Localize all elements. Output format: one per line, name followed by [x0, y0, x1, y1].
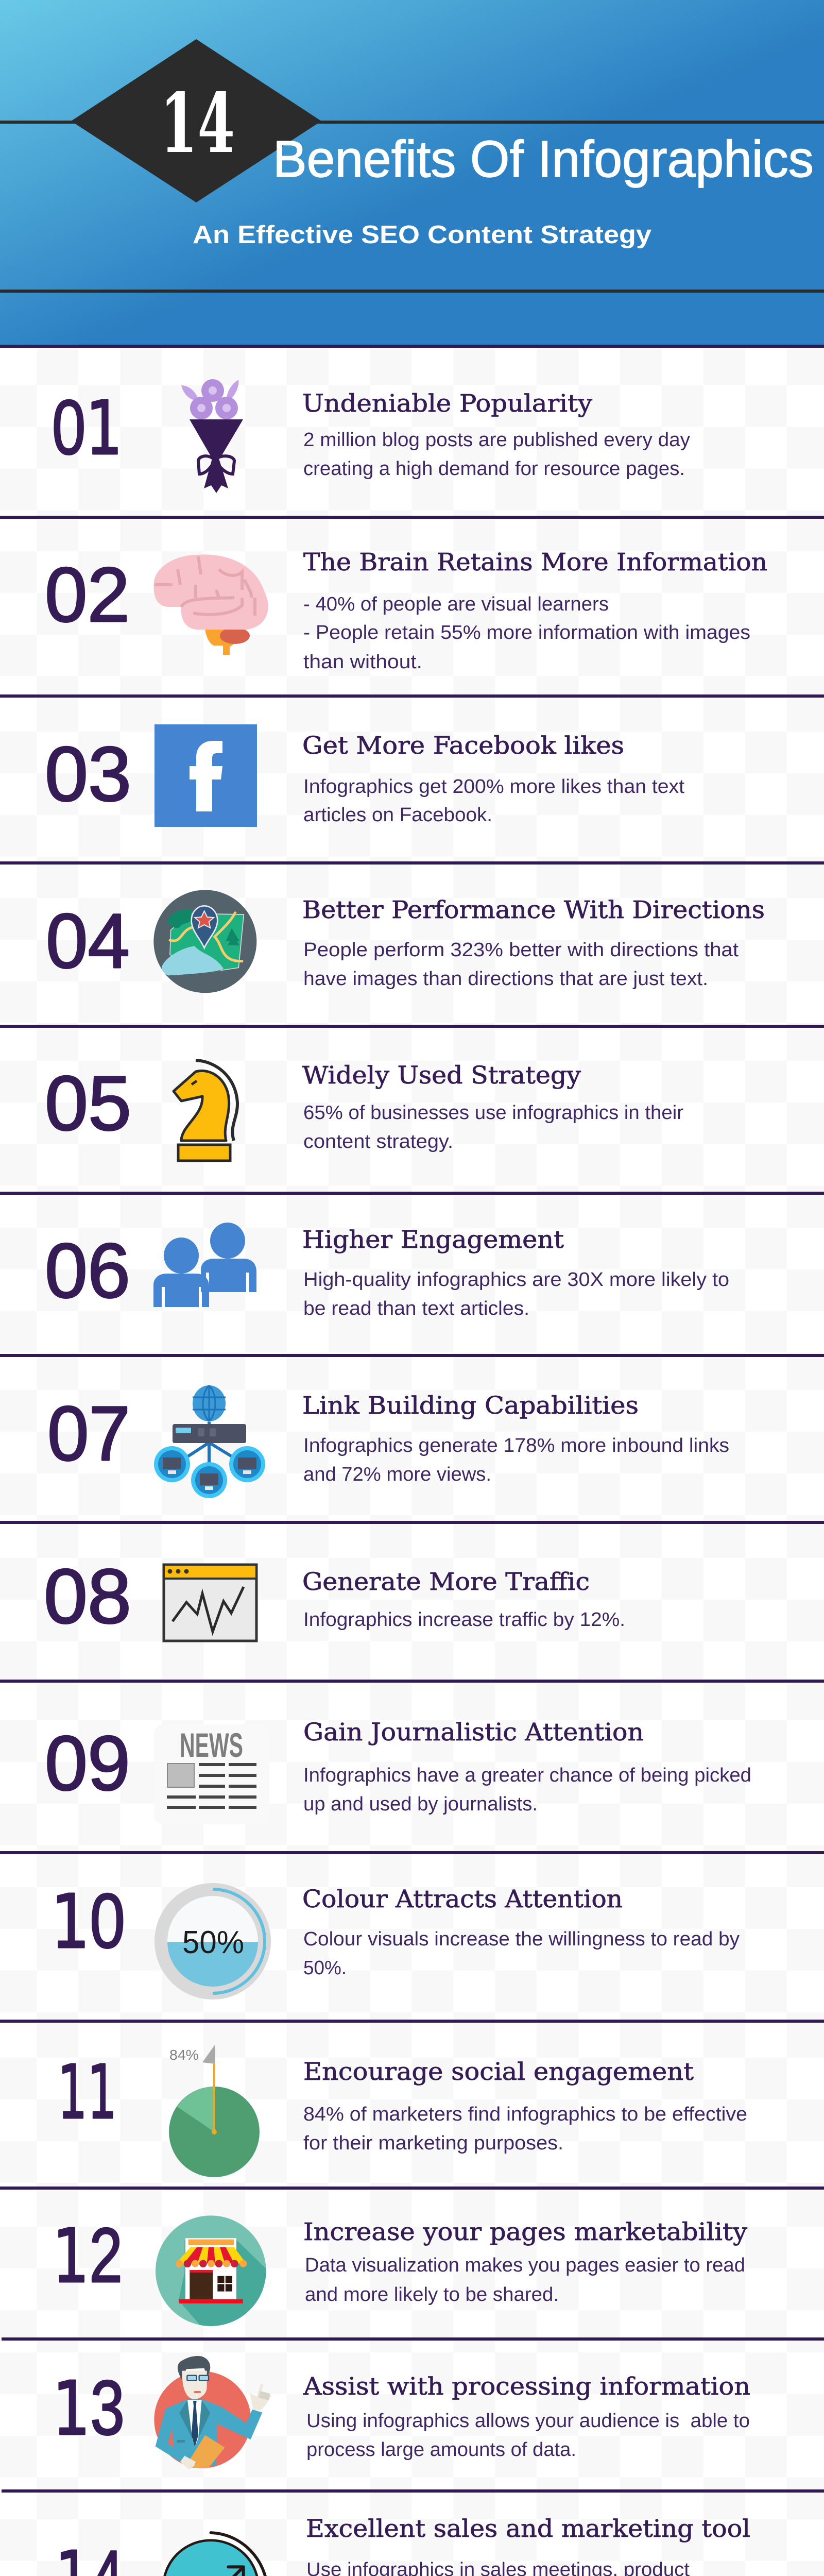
body text [306, 2410, 750, 2461]
body text [303, 1102, 683, 1153]
icon: brain [153, 554, 268, 655]
number 05: 05 [45, 1060, 131, 1146]
number 02: 02 [45, 551, 130, 638]
panel: 01 undeniable popularity [0, 348, 824, 518]
body text: Data visualization makes you pages easier to read [305, 2255, 745, 2276]
number 13: 13 [53, 2364, 125, 2452]
heading: Undeniable Popularity [302, 389, 592, 418]
diamond badge [71, 39, 321, 202]
heading: Increase your pages marketability [303, 2218, 747, 2246]
heading: Generate More Traffic [302, 1568, 590, 1596]
icon: bouquet [181, 379, 243, 493]
body text [303, 939, 739, 990]
heading: Get More Facebook likes [302, 732, 624, 760]
icon: newspaper [154, 1724, 269, 1824]
body text: People perform 323% better with directions that [303, 939, 739, 961]
heading: Colour Attracts Attention [302, 1885, 623, 1913]
title number 14: 14 [160, 76, 235, 172]
icon: growth chart [156, 2533, 267, 2576]
body text: articles on Facebook. [303, 804, 492, 826]
body text: - People retain 55% more information with images [303, 622, 750, 643]
icon: businessman [154, 2356, 271, 2469]
body text [303, 1269, 729, 1319]
body text: and more likely to be shared. [305, 2284, 559, 2306]
heading: Excellent sales and marketing tool [306, 2515, 750, 2543]
number 04: 04 [46, 897, 130, 984]
icon: network [154, 1385, 265, 1498]
title: Benefits Of Infographics [273, 130, 814, 188]
heading: Better Performance With Directions [302, 896, 765, 924]
body text: for their marketing purposes. [303, 2132, 563, 2154]
body text: Infographics get 200% more likes than text [303, 776, 684, 798]
icon: shop [156, 2215, 266, 2326]
number 03: 03 [45, 731, 131, 817]
icon: traffic chart window [164, 1565, 256, 1641]
body text: content strategy. [303, 1131, 453, 1153]
body text: Infographics generate 178% more inbound links [303, 1435, 729, 1456]
body text: 84% of marketers find infographics to be effective [303, 2104, 747, 2125]
body text [303, 1435, 729, 1485]
heading: The Brain Retains More Information [303, 548, 767, 577]
number 12: 12 [53, 2212, 123, 2299]
body text: 50%. [303, 1957, 347, 1979]
panel: 03 facebook [0, 696, 824, 863]
body text: - 40% of people are visual learners [303, 594, 609, 615]
body text: process large amounts of data. [306, 2439, 576, 2461]
heading: Link Building Capabilities [302, 1392, 639, 1420]
panel: 07 link building [0, 1357, 824, 1530]
panel: 12 marketability [58, 2215, 748, 2326]
number 08: 08 [44, 1553, 131, 1639]
number 10: 10 [51, 1877, 125, 1965]
body text: Infographics have a greater chance of being picked [303, 1765, 751, 1786]
icon: map [153, 890, 256, 993]
panel: 04 directions [0, 863, 824, 1026]
panel: 08 traffic [0, 1522, 824, 1680]
number 11: 11 [58, 2049, 117, 2136]
body text: Infographics increase traffic by 12%. [303, 1609, 625, 1631]
number 06: 06 [45, 1227, 130, 1314]
panel: 02 brain [0, 517, 824, 698]
body text: be read than text articles. [303, 1298, 529, 1319]
heading: Higher Engagement [302, 1226, 564, 1254]
body text: up and used by journalists. [303, 1793, 538, 1815]
heading: Widely Used Strategy [302, 1061, 581, 1090]
body text: than without. [303, 651, 422, 673]
icon: chess knight [174, 1060, 237, 1161]
body text: High-quality infographics are 30X more likely to [303, 1269, 729, 1291]
panel: 05 strategy [0, 1028, 824, 1193]
icon: facebook [154, 724, 257, 827]
body text [303, 594, 750, 673]
body text [303, 2104, 747, 2154]
subtitle: An Effective SEO Content Strategy [193, 221, 651, 249]
body text: 2 million blog posts are published every day [303, 429, 690, 451]
body text [303, 1928, 740, 1979]
icon: pie chart: 84% [169, 2047, 199, 2063]
number 07: 07 [47, 1390, 130, 1477]
body text: Colour visuals increase the willingness to read by [303, 1928, 740, 1950]
body text: and 72% more views. [303, 1464, 491, 1485]
body text [303, 1765, 751, 1815]
panel: 10 colour [0, 1854, 824, 2022]
body text [303, 776, 684, 826]
icon: 50 percent gauge [154, 1883, 271, 1999]
icon: pie chart [169, 2044, 260, 2177]
icon: newspaper: NEWS [180, 1726, 243, 1764]
panel: 09 journalists [0, 1683, 824, 1853]
icon: people [153, 1223, 256, 1307]
number 09: 09 [45, 1720, 130, 1806]
panel: header [0, 0, 824, 346]
body text [303, 429, 690, 480]
panel: 11 social engagement [0, 2023, 824, 2188]
icon: 50 percent gauge: 50% [182, 1925, 244, 1960]
heading: Encourage social engagement [303, 2058, 694, 2086]
panel: 13 processing [0, 2341, 824, 2493]
body text: creating a high demand for resource pages. [303, 458, 685, 480]
panel: 14 sales tool [0, 2493, 824, 2576]
body text: have images than directions that are just text. [303, 968, 708, 990]
heading: Assist with processing information [303, 2372, 750, 2401]
number 01: 01 [52, 384, 123, 471]
panel: 06 engagement [0, 1195, 824, 1355]
body text: 65% of businesses use infographics in their [303, 1102, 683, 1124]
body text: Using infographics allows your audience is able to [306, 2410, 750, 2432]
heading: Gain Journalistic Attention [303, 1718, 644, 1747]
body text [305, 2255, 745, 2306]
